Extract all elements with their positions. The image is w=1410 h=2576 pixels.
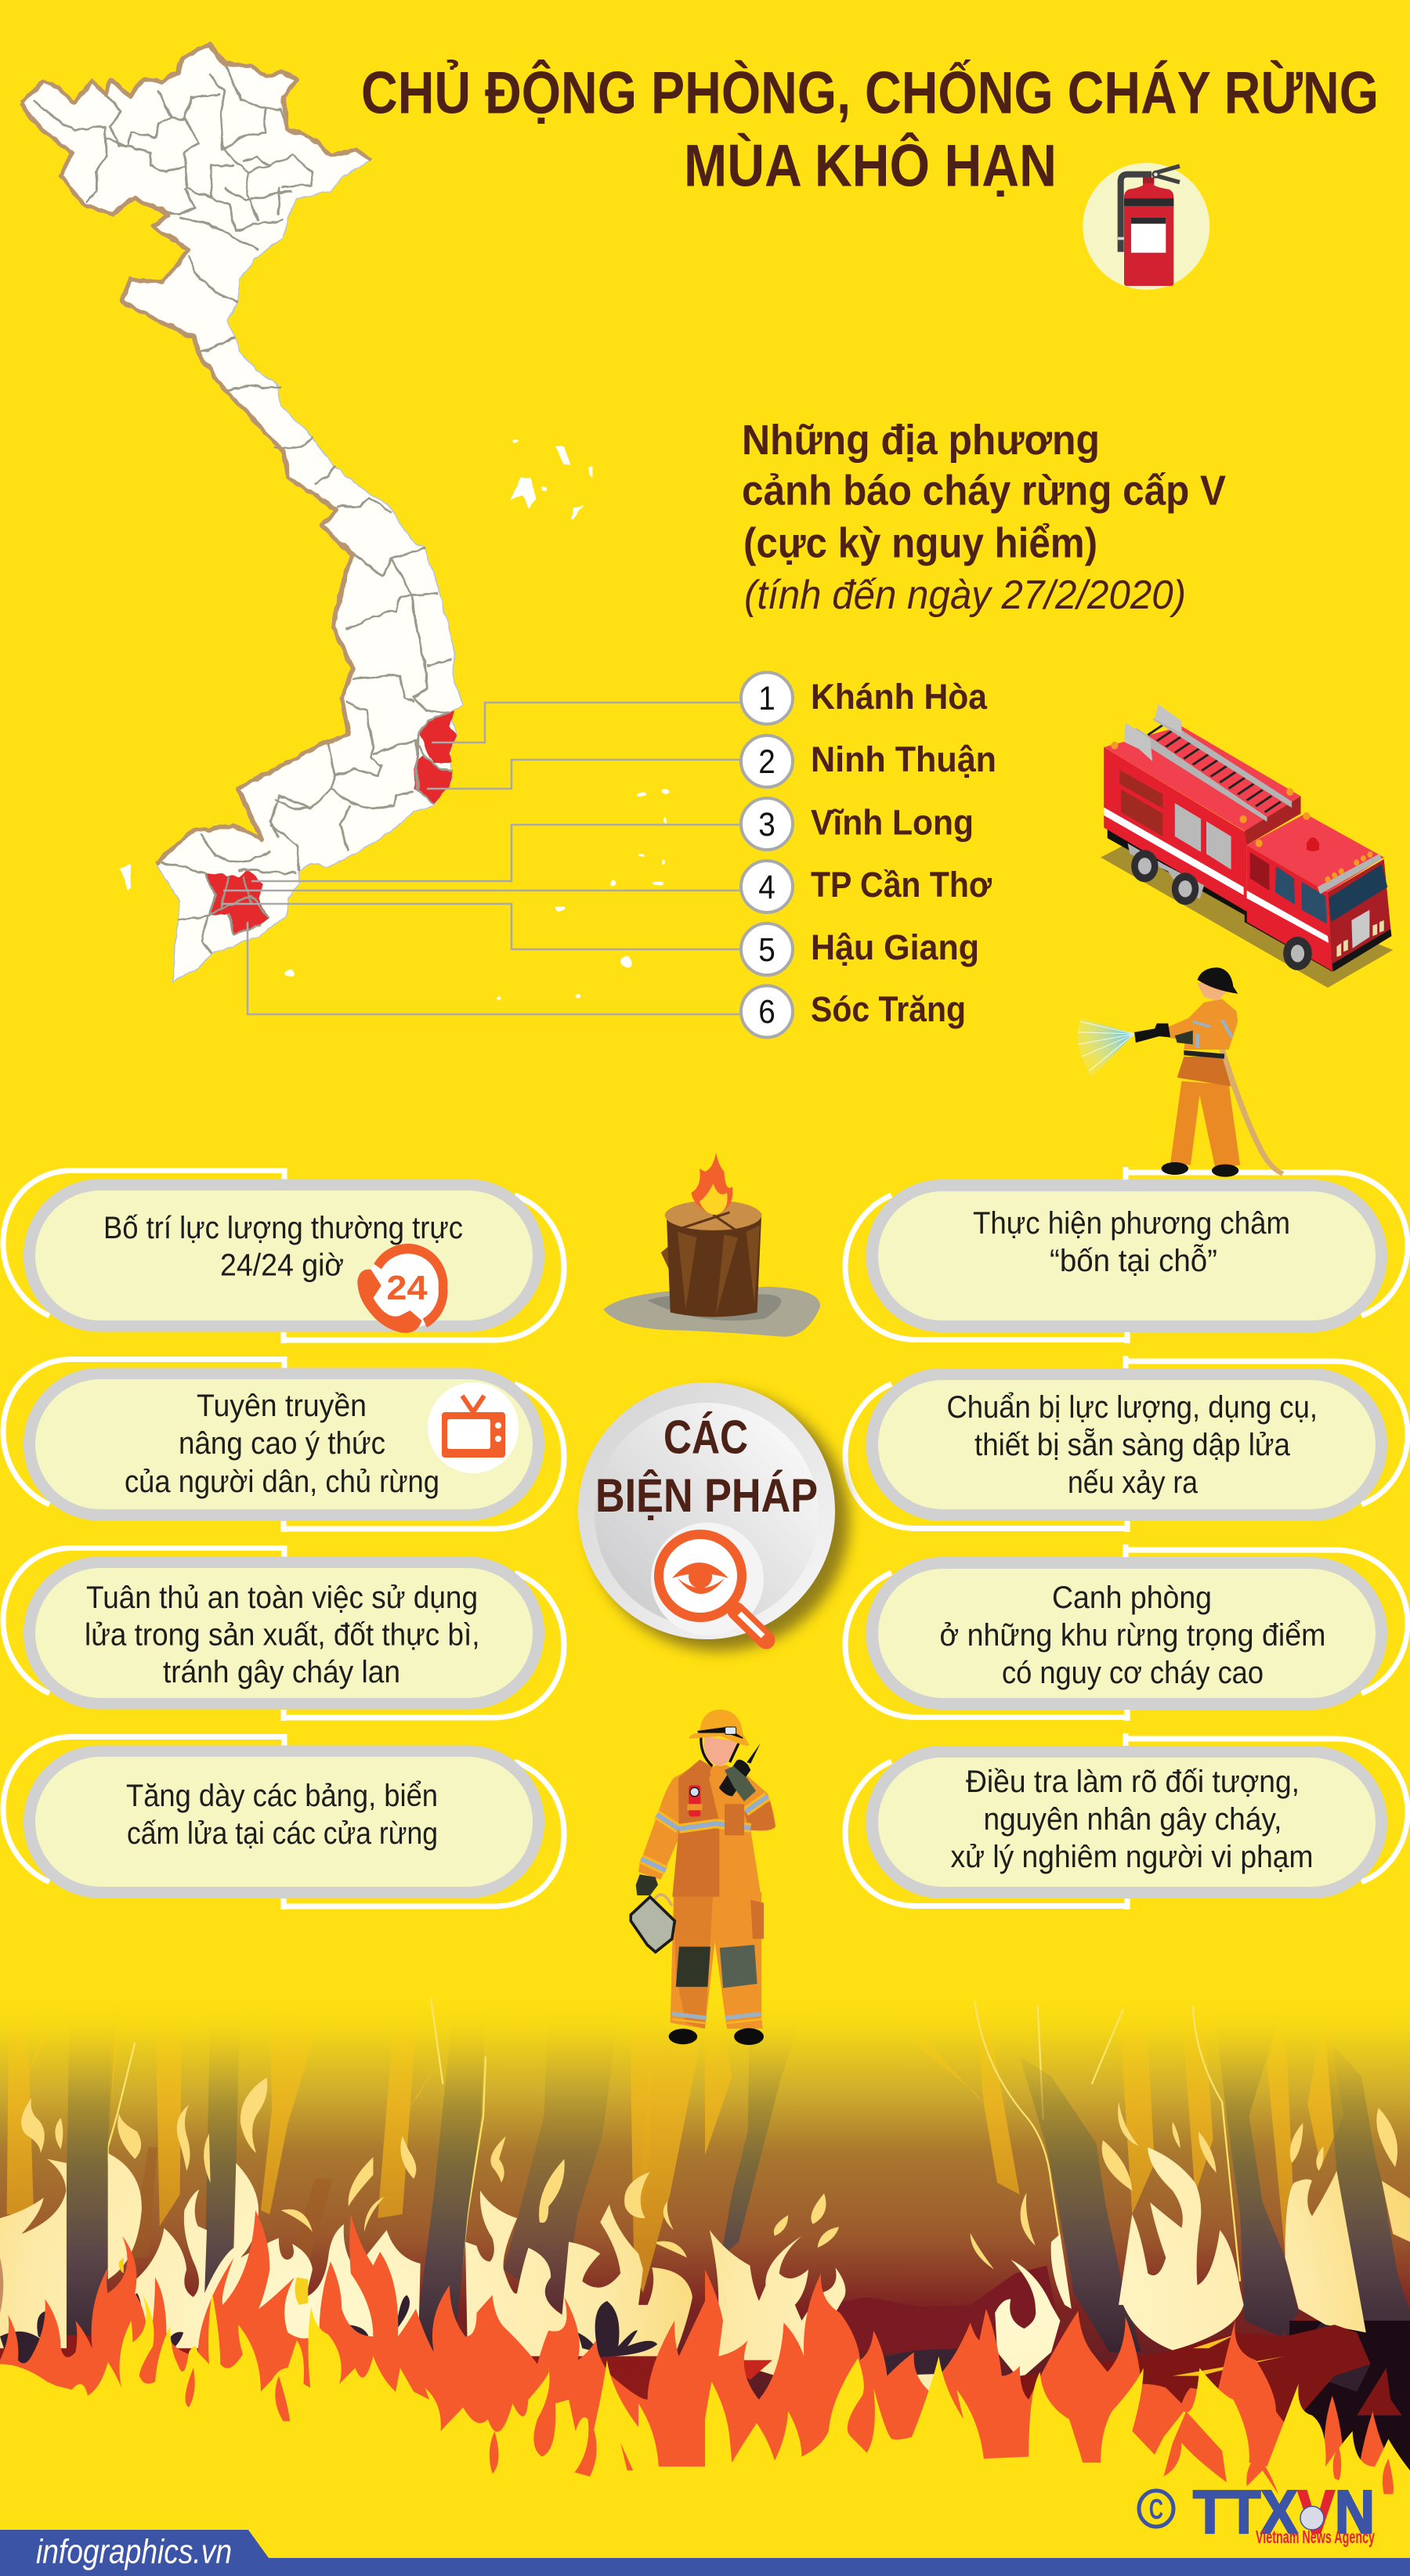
- orange flames: [0, 2210, 705, 2470]
- item 1: [741, 672, 988, 724]
- item 1: 1: [758, 679, 776, 717]
- subtitle: Những địa phương: [742, 417, 1100, 464]
- icon: television: [428, 1382, 519, 1473]
- title: [361, 60, 1379, 199]
- measure card: on-duty forces: 24/24 giờ: [220, 1248, 344, 1283]
- panel: measures left column: [3, 1168, 564, 1909]
- orange drips right: [1163, 2412, 1394, 2494]
- red highlighted provinces: [204, 711, 457, 934]
- measure card: raise awareness: [3, 1357, 564, 1532]
- item 5: 5: [758, 930, 776, 968]
- badge: the measures: [578, 1382, 849, 1651]
- border line with neighbours: [21, 44, 371, 864]
- dark trunks: [60, 1997, 620, 2364]
- panel: measures right column: [845, 1167, 1408, 1909]
- measure card: warning signs: [3, 1734, 564, 1909]
- illustration: burning tree stump: [603, 1152, 820, 1337]
- item 4: 4: [758, 868, 776, 905]
- item 2: [741, 735, 996, 787]
- tongues: [774, 2102, 1397, 2270]
- list: provinces: [741, 672, 996, 1037]
- item 3: Vĩnh Long: [811, 802, 974, 843]
- province borders: [34, 65, 454, 955]
- measure card: patrol: Canh phòng: [1052, 1581, 1212, 1615]
- yellow front flames: [0, 2293, 705, 2576]
- item 4: TP Cần Thơ: [811, 865, 992, 905]
- red hill: [826, 2266, 1065, 2352]
- flame tongues: [21, 2077, 687, 2258]
- smoky background: [0, 1997, 1410, 2428]
- measure card: prepare forces: [845, 1356, 1408, 1532]
- title: MÙA KHÔ HẠN: [684, 133, 1057, 199]
- measure card: investigate: [845, 1733, 1408, 1909]
- item 6: 6: [758, 992, 776, 1030]
- measure card: raise awareness: Tuyên truyền: [197, 1389, 367, 1423]
- icon: fire extinguisher: [1083, 163, 1209, 290]
- map of Vietnam: [21, 44, 670, 1000]
- icon: 24h phone: 24: [386, 1269, 428, 1307]
- measure card: prepare forces: thiết bị sẵn sàng dập lửa: [974, 1427, 1291, 1462]
- item 2: Ninh Thuận: [811, 739, 996, 779]
- cream flames: [0, 2153, 692, 2356]
- land mass: [21, 44, 463, 981]
- item 3: [741, 798, 974, 850]
- islands: [118, 439, 670, 1000]
- measure card: patrol: có nguy cơ cháy cao: [1002, 1656, 1264, 1690]
- icon: magnifier with eye: [651, 1523, 766, 1640]
- measure card: investigate: Điều tra làm rõ đối tượng,: [966, 1765, 1300, 1799]
- badge: the measures: CÁC: [663, 1411, 748, 1463]
- illustration: firefighter with hose: [1078, 967, 1283, 1177]
- orange flames right: [705, 2270, 1310, 2466]
- measure card: warning signs: Tăng dày các bảng, biển: [126, 1779, 438, 1813]
- subtitle: [742, 417, 1226, 618]
- item 6: Sóc Trăng: [811, 989, 966, 1029]
- measure card: patrol: [845, 1545, 1408, 1721]
- measure card: fire safety: Tuân thủ an toàn việc sử dụng: [86, 1581, 478, 1615]
- item 2: 2: [758, 742, 776, 780]
- dark shrubs: [0, 2293, 657, 2364]
- orange drips: [185, 2368, 633, 2477]
- measure card: raise awareness: nâng cao ý thức: [179, 1426, 385, 1461]
- illustration: firefighter with radio: [631, 1710, 776, 2045]
- yellow front flames right: [705, 2356, 1410, 2576]
- measure card: fire safety: tránh gây cháy lan: [163, 1655, 400, 1689]
- subtitle: (tính đến ngày 27/2/2020): [744, 573, 1186, 618]
- icon: 24h phone: [357, 1247, 447, 1333]
- footer bar: infographics.vn: [36, 2533, 232, 2571]
- measure card: prepare forces: nếu xảy ra: [1068, 1465, 1198, 1500]
- measure card: four on-the-spot: Thực hiện phương châm: [973, 1206, 1290, 1241]
- measure card: investigate: xử lý nghiêm người vi phạm: [951, 1840, 1313, 1874]
- red logs: [1020, 2325, 1371, 2431]
- subtitle: (cực kỳ nguy hiểm): [743, 520, 1097, 567]
- dark trunks right: [721, 1997, 1299, 2352]
- measure card: raise awareness: của người dân, chủ rừng: [125, 1465, 439, 1499]
- item 5: [741, 923, 979, 975]
- illustration: fire truck: [1101, 704, 1393, 988]
- item 4: [741, 861, 992, 912]
- subtitle: cảnh báo cháy rừng cấp V: [742, 467, 1226, 514]
- item 5: Hậu Giang: [811, 927, 979, 967]
- measure card: on-duty forces: [3, 1168, 564, 1343]
- illustration: forest fire: [0, 1997, 1410, 2576]
- item 3: 3: [758, 805, 776, 843]
- badge: the measures: BIỆN PHÁP: [595, 1469, 818, 1522]
- measure card: patrol: ở những khu rừng trọng điểm: [940, 1618, 1325, 1653]
- item 1: Khánh Hòa: [811, 677, 988, 717]
- logo: TTXVN: C: [1149, 2494, 1163, 2525]
- cream flames right: [710, 2148, 1410, 2392]
- measure card: investigate: nguyên nhân gây cháy,: [984, 1802, 1282, 1837]
- measure card: warning signs: cấm lửa tại các cửa rừng: [127, 1816, 438, 1851]
- footer bar: [0, 2530, 1410, 2576]
- measure card: on-duty forces: Bố trí lực lượng thường trực: [103, 1211, 463, 1245]
- measure card: four on-the-spot: “bốn tại chỗ”: [1050, 1243, 1217, 1278]
- red floor: [0, 2332, 705, 2412]
- measure card: fire safety: [3, 1545, 564, 1721]
- measure card: fire safety: lửa trong sản xuất, đốt thực bì,: [85, 1618, 479, 1653]
- item 6: [741, 985, 966, 1037]
- right half: [705, 1997, 1410, 2576]
- left half: [0, 1997, 705, 2576]
- measure card: prepare forces: Chuẩn bị lực lượng, dụng cụ,: [946, 1390, 1318, 1425]
- measure card: four on-the-spot: [845, 1167, 1408, 1343]
- leader lines: [222, 703, 741, 1014]
- logo: TTXVN: TTXVN: [1193, 2477, 1375, 2546]
